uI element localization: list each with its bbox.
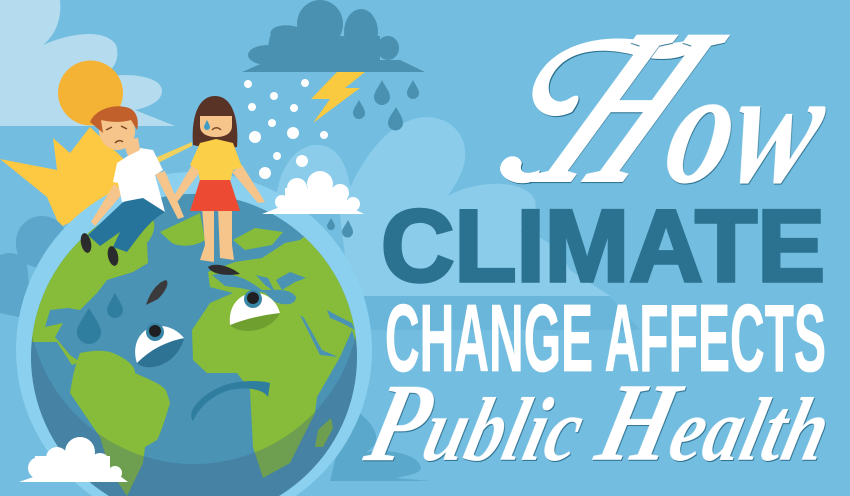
ocean — [31, 187, 357, 496]
background: darker shapes lower left — [0, 223, 60, 320]
background: pale cloud right of globe — [340, 117, 612, 297]
boy jeans — [88, 198, 165, 252]
girl legs — [200, 208, 234, 262]
girl tear — [204, 120, 210, 130]
sun — [0, 60, 192, 227]
land: madagascar — [315, 418, 333, 447]
white cloud on horizon — [262, 171, 364, 214]
swash of the capital — [500, 38, 692, 183]
snow dots — [244, 79, 328, 179]
title: CLIMATE: CLIMATE — [381, 189, 825, 303]
lightning bolt — [311, 72, 365, 123]
girl top — [190, 139, 242, 182]
girl character — [172, 96, 265, 262]
rain drops — [327, 80, 419, 238]
girl fringe — [199, 100, 233, 116]
boy right arm — [155, 171, 184, 219]
background: pale cloud behind white cloud — [275, 145, 352, 214]
boy character — [79, 106, 184, 267]
land: south america — [70, 351, 170, 496]
boy t-shirt — [113, 148, 165, 212]
background: pale cloud top left — [0, 0, 175, 126]
land: greenland and north patch — [160, 213, 283, 250]
globe face — [77, 265, 280, 421]
title: How — [498, 0, 842, 231]
right eye — [230, 290, 280, 331]
girl arms — [172, 165, 265, 203]
boy head — [95, 108, 139, 154]
white cloud lower left — [19, 437, 128, 482]
boy left arm — [91, 184, 124, 226]
sun disc — [58, 60, 123, 126]
storm cloud — [242, 0, 425, 72]
land: africa and eurasia — [192, 230, 357, 478]
boy hair — [90, 106, 138, 133]
boy neck — [122, 138, 140, 156]
tear drops — [107, 293, 123, 318]
girl mouth — [212, 128, 221, 130]
seas — [212, 272, 355, 357]
girl face — [200, 112, 232, 137]
girl hair — [193, 96, 237, 150]
letters ow: ow — [652, 36, 842, 218]
left eye — [135, 323, 184, 367]
sun ray streak — [155, 142, 192, 163]
globe — [31, 194, 357, 496]
frown mouth — [191, 381, 270, 421]
sun rays — [0, 127, 150, 227]
globe shading crescent — [31, 336, 357, 496]
background: dark cloud behind public health — [330, 410, 430, 481]
background: shade left of globe — [16, 216, 68, 268]
boy shoes — [79, 232, 93, 254]
girl skirt — [190, 180, 240, 211]
globe outer ring — [16, 172, 372, 496]
boy face features — [106, 126, 127, 143]
right eyebrow — [208, 265, 240, 275]
background: darker band behind headline — [360, 296, 640, 330]
left eyebrow — [146, 280, 167, 305]
land: north america — [32, 220, 154, 365]
